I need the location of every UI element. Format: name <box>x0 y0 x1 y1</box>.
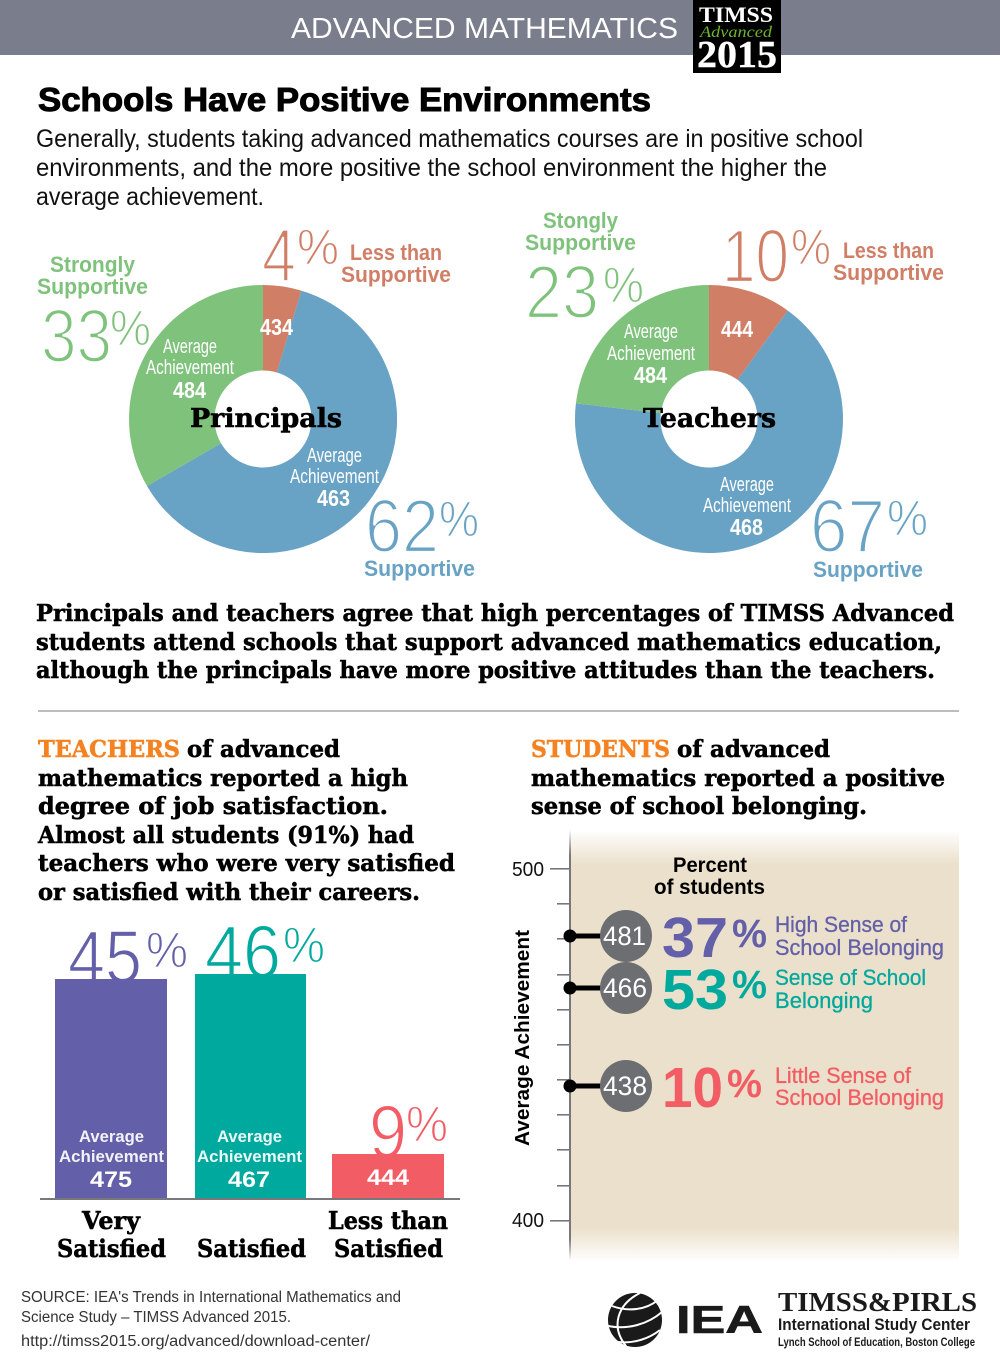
donut chart: teachers: 484 <box>634 362 667 388</box>
row: sense of school belonging: Belonging <box>775 988 873 1013</box>
source note: SOURCE: IEA's Trends in International Mathematics and <box>21 1289 401 1306</box>
logo: IEA globe <box>608 1293 763 1347</box>
strongly supportive label: Strongly <box>50 252 136 277</box>
row: high sense of school belonging: High Sense of <box>775 912 908 937</box>
row: little sense of school belonging: % <box>727 1062 762 1106</box>
donut chart: principals: Principals <box>190 404 342 434</box>
bar: less than satisfied: 444 <box>367 1165 410 1190</box>
donut chart: principals: 434 <box>260 314 293 340</box>
row: sense of school belonging: Sense of School <box>775 965 926 990</box>
panel: teachers donut <box>525 208 944 582</box>
bar: very satisfied: 475 <box>90 1167 132 1192</box>
less than supportive label: 10 <box>722 214 789 298</box>
supportive label: 62 <box>365 484 439 568</box>
donut chart: teachers: Achievement <box>703 495 791 517</box>
panel: principals donut <box>37 213 479 581</box>
intro text: Generally, students taking advanced mathematics courses are in positive school <box>36 125 863 153</box>
bar: satisfied: % <box>283 917 325 973</box>
bar: very satisfied <box>55 915 188 1199</box>
strongly supportive label: Stongly <box>543 208 619 233</box>
source note: Science Study – TIMSS Advanced 2015. <box>21 1309 291 1326</box>
bar: satisfied: Achievement <box>197 1147 302 1166</box>
less than supportive label: Less than <box>843 238 934 263</box>
less than supportive label <box>262 213 451 297</box>
bar: very satisfied: 45 <box>68 915 142 999</box>
logo: TIMSS Advanced 2015: Advanced <box>699 24 773 41</box>
row: high sense of school belonging: % <box>732 912 767 956</box>
row: little sense of school belonging: 10 <box>662 1056 723 1120</box>
less than supportive label: Supportive <box>341 262 451 287</box>
axis labels: 500 <box>512 859 544 881</box>
supportive label <box>364 484 479 581</box>
summary statement: Principals and teachers agree that high percentages of TIMSS Advanced <box>36 600 954 627</box>
intro text <box>36 125 863 211</box>
column heading: Percent <box>673 854 747 877</box>
bar: satisfied <box>195 910 325 1199</box>
donut chart: teachers <box>575 285 843 553</box>
less than supportive label <box>722 214 944 298</box>
column heading: of students <box>654 876 765 899</box>
logo: TIMSS Advanced 2015 <box>693 0 781 76</box>
strongly supportive label <box>525 208 644 334</box>
students text block: mathematics reported a positive <box>531 765 945 792</box>
strongly supportive label: 23 <box>525 250 599 334</box>
summary statement: students attend schools that support advanced mathematics education, <box>36 629 942 656</box>
source note <box>21 1289 401 1350</box>
students text block: STUDENTS <box>531 736 670 763</box>
bar category labels: Less than <box>328 1206 448 1235</box>
axis labels: 400 <box>512 1210 544 1232</box>
strongly supportive label: 33 <box>41 294 112 378</box>
logo: TIMSS and PIRLS International Study Center: International Study Center <box>778 1316 971 1334</box>
donut chart: teachers: Teachers <box>643 404 776 434</box>
donut chart: teachers: Average <box>624 321 678 343</box>
donut chart: teachers: Average <box>720 474 774 496</box>
teachers text block: teachers who were very satisfied <box>38 850 455 877</box>
supportive label: 67 <box>810 484 885 568</box>
bar: very satisfied: Average <box>79 1127 144 1146</box>
logo: TIMSS Advanced 2015: 2015 <box>697 34 777 76</box>
bar: satisfied: Average <box>217 1127 282 1146</box>
bar: satisfied: 46 <box>205 910 281 994</box>
chart: sense of school belonging <box>512 830 959 1262</box>
bar: satisfied: 467 <box>228 1167 270 1192</box>
bar: less than satisfied: % <box>406 1096 448 1152</box>
logo: TIMSS Advanced 2015: TIMSS <box>699 2 773 27</box>
intro text: average achievement. <box>36 183 264 211</box>
bar category labels: Satisfied <box>57 1234 166 1263</box>
supportive label: % <box>887 490 928 546</box>
logo: TIMSS and PIRLS International Study Center: TIMSS&PIRLS <box>778 1287 977 1317</box>
less than supportive label: Less than <box>350 240 442 265</box>
axis labels <box>512 859 544 1232</box>
header banner: ADVANCED MATHEMATICS <box>291 13 678 45</box>
students text block <box>531 736 945 820</box>
donut chart: principals: 463 <box>317 485 350 511</box>
supportive label: Supportive <box>364 556 475 581</box>
donut chart: teachers: 468 <box>730 514 763 540</box>
supportive label: % <box>439 491 479 547</box>
donut chart: teachers: 444 <box>721 316 753 342</box>
bar category labels: Satisfied <box>334 1234 443 1263</box>
row: sense of school belonging: % <box>732 963 767 1007</box>
summary statement: although the principals have more positive attitudes than the teachers. <box>36 657 935 684</box>
strongly supportive label: % <box>603 257 644 313</box>
teachers text block: Almost all students (91%) had <box>37 822 414 849</box>
less than supportive label: Supportive <box>833 260 944 285</box>
row: high sense of school belonging: School Belonging <box>775 935 944 960</box>
bar: very satisfied: % <box>146 922 188 978</box>
row: little sense of school belonging: 438 <box>603 1071 647 1101</box>
donut chart: principals: Achievement <box>290 466 379 488</box>
row: sense of school belonging <box>564 958 926 1022</box>
strongly supportive label: Supportive <box>37 274 148 299</box>
row: sense of school belonging: 466 <box>603 973 647 1003</box>
row: high sense of school belonging <box>564 906 944 970</box>
donut chart: principals: Average <box>163 336 217 358</box>
bar: very satisfied: Achievement <box>59 1147 164 1166</box>
bar category labels: Satisfied <box>197 1234 306 1263</box>
title: Schools Have Positive Environments <box>38 81 651 118</box>
donut chart: principals: 484 <box>173 377 206 403</box>
teachers text block: of advanced <box>187 736 340 763</box>
students text block: sense of school belonging. <box>531 793 867 820</box>
less than supportive label: % <box>297 219 339 275</box>
row: high sense of school belonging: 481 <box>603 921 646 951</box>
supportive label: Supportive <box>813 557 923 582</box>
row: little sense of school belonging: School Belonging <box>775 1085 944 1110</box>
bar chart: job satisfaction <box>40 910 460 1263</box>
row: little sense of school belonging <box>564 1056 944 1120</box>
teachers text block <box>37 736 455 906</box>
logo: IEA globe: IEA <box>676 1299 763 1342</box>
less than supportive label: 4 <box>262 213 296 297</box>
bar category labels <box>57 1206 448 1263</box>
supportive label <box>810 484 928 582</box>
strongly supportive label: % <box>110 300 151 356</box>
bar: less than satisfied: 9 <box>369 1090 407 1174</box>
axis labels: Average Achievement <box>512 930 534 1146</box>
intro text: environments, and the more positive the school environment the higher the <box>36 154 827 182</box>
less than supportive label: % <box>791 219 831 275</box>
strongly supportive label <box>37 252 151 378</box>
teachers text block: mathematics reported a high <box>38 765 408 792</box>
row: little sense of school belonging: Little Sense of <box>775 1063 912 1088</box>
donut chart: principals: Achievement <box>146 357 234 379</box>
logo: TIMSS and PIRLS International Study Center <box>778 1287 977 1349</box>
column heading <box>654 854 765 899</box>
donut chart: principals <box>129 285 397 553</box>
teachers text block: or satisfied with their careers. <box>38 879 420 906</box>
bar: less than satisfied <box>332 1090 448 1199</box>
row: sense of school belonging: 53 <box>662 958 728 1022</box>
summary statement <box>36 600 954 684</box>
donut chart: principals: Average <box>307 445 362 467</box>
source note: http://timss2015.org/advanced/download-center/ <box>21 1333 371 1350</box>
students text block: of advanced <box>677 736 830 763</box>
donut chart: teachers: Achievement <box>607 343 695 365</box>
header banner <box>0 0 1000 55</box>
strongly supportive label: Supportive <box>525 230 636 255</box>
teachers text block: TEACHERS <box>38 736 180 763</box>
bar category labels: Very <box>81 1206 141 1235</box>
teachers text block: degree of job satisfaction. <box>38 793 388 820</box>
row: high sense of school belonging: 37 <box>662 906 728 970</box>
